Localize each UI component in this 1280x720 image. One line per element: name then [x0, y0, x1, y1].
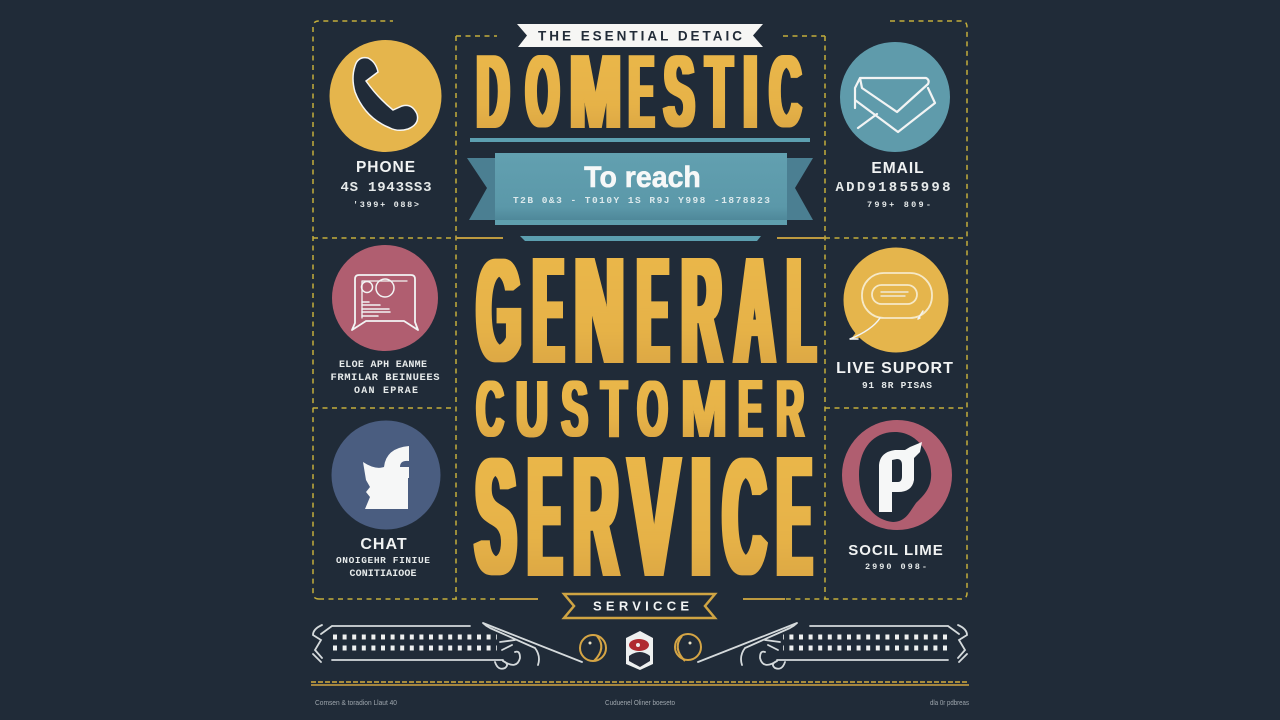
panel: social	[842, 420, 952, 572]
heading: customer: R	[776, 363, 804, 455]
heading: domestic: O	[526, 34, 559, 149]
icon: left gold badge	[580, 635, 606, 661]
icon: speech bubble	[844, 248, 948, 352]
heading: customer: T	[601, 363, 627, 455]
heading: domestic: M	[570, 33, 621, 151]
heading: domestic: D	[477, 33, 509, 151]
heading: service: E	[777, 421, 811, 614]
heading: service: C	[723, 424, 766, 610]
heading: customer	[476, 362, 804, 455]
heading: customer: U	[516, 364, 548, 454]
left ornament	[313, 623, 582, 669]
messaging text: ELOE APH EANME	[339, 360, 427, 371]
heading: domestic: E	[629, 32, 654, 151]
heading: service: V	[629, 420, 679, 614]
icon: phone	[330, 40, 442, 152]
heading: customer: E	[738, 362, 763, 455]
panel: chat	[332, 420, 440, 580]
icon: message bubble	[332, 245, 438, 351]
heading: general: N	[575, 226, 624, 397]
footer text: Cuduenel Oliner boeseto	[605, 698, 675, 707]
chat text	[336, 555, 430, 580]
right ornament	[698, 623, 967, 669]
icon: p logo	[842, 420, 952, 530]
panel: email	[836, 42, 950, 210]
footer rule	[311, 682, 969, 685]
heading: domestic	[477, 32, 801, 152]
heading: service: R	[574, 419, 618, 613]
teal rule	[470, 138, 810, 142]
social label: SOCIL LIME	[848, 542, 944, 559]
email label: EMAIL	[871, 160, 925, 177]
lower teal bar	[520, 236, 761, 241]
icon: f logo	[332, 420, 440, 530]
heading: general: E	[534, 224, 563, 396]
heading: customer: S	[562, 365, 588, 454]
ribbon: to reach	[467, 153, 813, 225]
bottom service ribbon	[564, 594, 715, 618]
heading: service: S	[476, 425, 516, 610]
heading: customer: M	[681, 362, 727, 455]
icon: envelope	[840, 42, 950, 152]
panel: live support	[836, 248, 954, 391]
chat label: CHAT	[360, 536, 408, 553]
top banner: THE ESENTIAL DETAIC	[538, 28, 742, 44]
heading: service: I	[691, 421, 711, 614]
heading: general: A	[735, 226, 774, 396]
heading: general: R	[682, 226, 721, 396]
phone note: '399+ 088>	[353, 200, 419, 210]
heading: domestic: C	[770, 34, 801, 149]
heading: customer: C	[476, 365, 504, 454]
email address: ADD91855998	[836, 180, 950, 196]
heading: general: L	[788, 224, 815, 396]
heading: general: G	[477, 229, 521, 393]
phone number: 4S 1943SS3	[340, 180, 432, 196]
heading: domestic: T	[706, 33, 732, 152]
ribbon: to reach: To reach	[584, 161, 701, 194]
email note: 799+ 809-	[867, 200, 931, 210]
heading: service: E	[528, 420, 561, 613]
social note: 2990 098-	[865, 562, 927, 572]
messaging text: OAN EPRAE	[354, 386, 418, 397]
heading: domestic: I	[743, 33, 758, 151]
live support note: 91 8R PISAS	[862, 380, 932, 391]
heading: general	[477, 224, 815, 397]
ribbon: to reach: T2B 0&3 - T010Y 1S R9J Y998 -1878823	[513, 195, 770, 206]
panel: messaging	[330, 245, 440, 397]
messaging text: FRMILAR BEINUEES	[330, 372, 440, 384]
top banner	[517, 24, 763, 47]
chat text: CONITIAIOOE	[350, 569, 416, 580]
icon: center medallion	[626, 631, 653, 670]
bottom service ribbon: SERVICCE	[593, 598, 689, 614]
chat text: ONOIGEHR FINIUE	[336, 555, 430, 566]
icon: right gold badge	[675, 634, 701, 661]
footer text: Comsen & toradion Llaut 40	[315, 698, 397, 707]
footer text	[315, 698, 969, 707]
footer text: dla 0r pdbreas	[930, 698, 969, 707]
panel: phone	[330, 40, 442, 210]
heading: general: E	[638, 225, 668, 396]
heading: service	[476, 419, 811, 614]
messaging text	[330, 360, 440, 397]
heading: domestic: S	[664, 35, 694, 149]
live support label: LIVE SUPORT	[836, 360, 954, 377]
phone label: PHONE	[356, 159, 416, 176]
heading: customer: O	[637, 365, 668, 454]
